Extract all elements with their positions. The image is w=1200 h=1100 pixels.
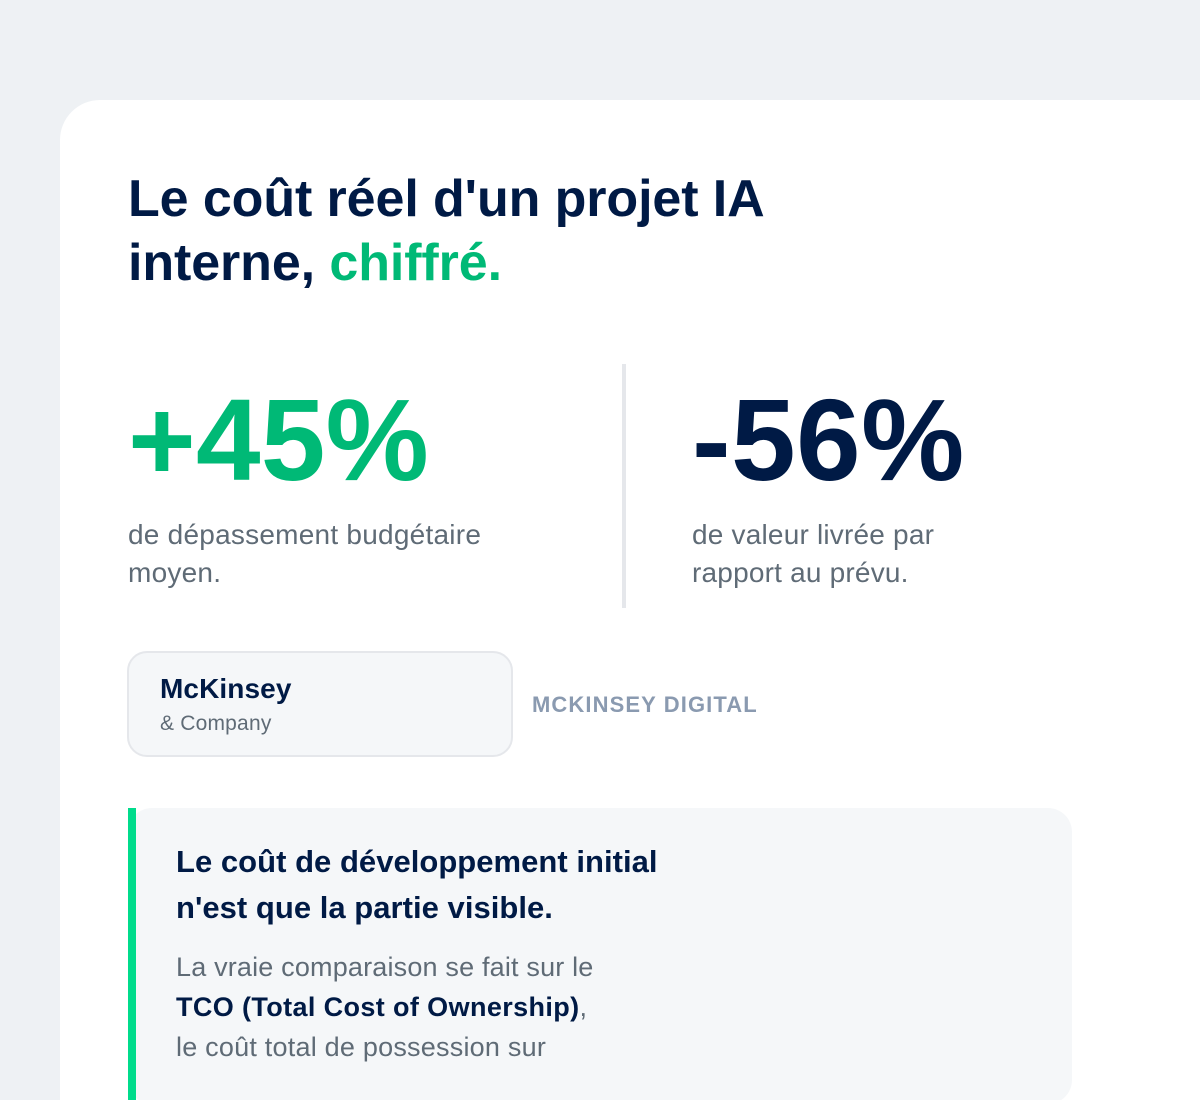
callout heading: n'est que la partie visible.	[176, 890, 553, 925]
stat label: budget overrun: de dépassement budgétaire	[128, 519, 481, 550]
stat label: value delivered	[692, 519, 934, 588]
stat: budget overrun	[128, 375, 481, 588]
title	[128, 170, 765, 292]
callout heading: Le coût de développement initial	[176, 844, 658, 879]
title: interne, chiffré.	[128, 234, 502, 292]
source logo badge	[127, 651, 513, 757]
callout body text: TCO (Total Cost of Ownership),	[176, 992, 587, 1022]
stat label: value delivered: de valeur livrée par	[692, 519, 934, 550]
stat label: budget overrun: moyen.	[128, 557, 221, 588]
stat label: value delivered: rapport au prévu.	[692, 557, 909, 588]
divider between stats	[622, 364, 626, 608]
callout panel	[128, 808, 1072, 1100]
callout background	[128, 808, 1072, 1100]
stat: value delivered	[692, 375, 965, 588]
stat value: -56%: -56%	[692, 375, 965, 505]
callout accent bar	[128, 808, 136, 1100]
callout body text: le coût total de possession sur	[176, 1032, 546, 1062]
callout body text: La vraie comparaison se fait sur le	[176, 952, 594, 982]
logo name: McKinsey	[160, 673, 292, 704]
source label: MCKINSEY DIGITAL	[532, 692, 758, 717]
title: Le coût réel d'un projet IA	[128, 170, 765, 228]
callout heading	[176, 844, 658, 925]
stat label: budget overrun	[128, 519, 481, 588]
callout body text	[176, 952, 594, 1062]
logo subtitle: & Company	[160, 712, 272, 735]
stat value: +45%: +45%	[128, 375, 429, 505]
